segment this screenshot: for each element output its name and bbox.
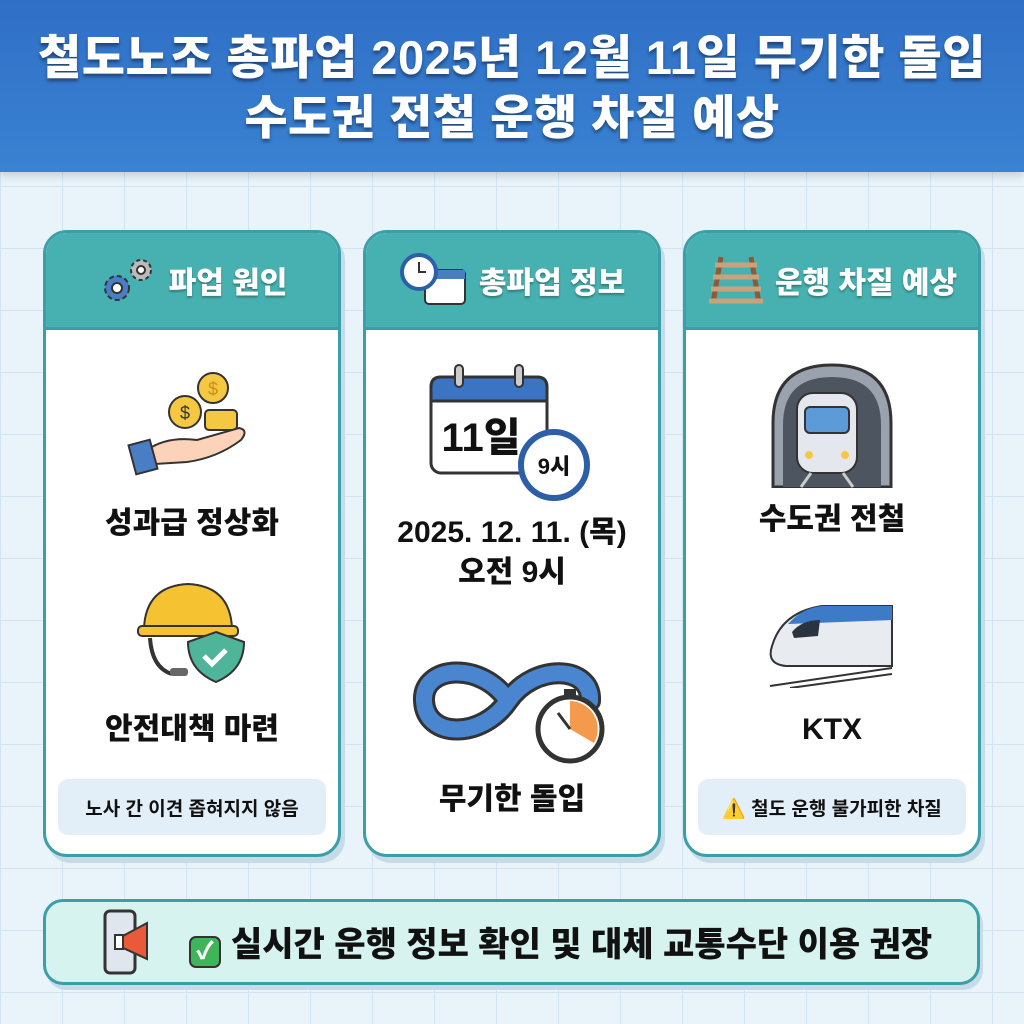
item: 수도권 전철: 수도권 전철 <box>759 503 905 536</box>
title <box>0 0 1024 172</box>
heading: 파업 원인 <box>46 233 338 330</box>
item: date: 2025. 12. 11. (목) <box>397 516 627 549</box>
heading: 운행 차질 예상: 운행 차질 예상 <box>775 267 957 300</box>
panel: causes <box>43 230 341 857</box>
item: 안전대책 마련: 안전대책 마련 <box>105 713 279 746</box>
title: 철도노조 총파업 2025년 12월 11일 무기한 돌입 <box>38 31 986 84</box>
note <box>58 779 326 835</box>
bottom banner <box>43 899 980 985</box>
icon: calendar with clock <box>430 364 590 501</box>
note: 노사 간 이견 좁혀지지 않음 <box>85 798 299 820</box>
icon: hand with coins <box>127 372 246 476</box>
item: KTX: KTX <box>802 713 862 746</box>
item: 무기한 돌입: 무기한 돌입 <box>439 783 585 816</box>
icon: helmet and shield <box>137 583 245 684</box>
panel: disruption <box>683 230 981 857</box>
icon: calendar with clock: 9시 <box>538 454 570 479</box>
item: 성과급 정상화: 성과급 정상화 <box>105 507 279 540</box>
icon: subway in tunnel <box>772 364 892 488</box>
item: date <box>397 516 627 589</box>
icon: infinity and stopwatch <box>412 662 604 764</box>
item: date: 오전 9시 <box>458 556 566 589</box>
heading: 운행 차질 예상 <box>686 233 978 330</box>
icon: phone with megaphone <box>104 910 148 974</box>
icon: hand with coins: $ <box>208 379 218 399</box>
icon: KTX train <box>770 605 893 688</box>
text: recommendation: ✓ <box>196 938 214 964</box>
note: ⚠️ 철도 운행 불가피한 차질 <box>722 798 942 820</box>
note <box>698 779 966 835</box>
heading: 총파업 정보: 총파업 정보 <box>479 267 625 300</box>
panel: strike info <box>363 230 661 857</box>
heading: 총파업 정보 <box>366 233 658 330</box>
text: recommendation: 실시간 운행 정보 확인 및 대체 교통수단 이용 권장 <box>231 926 932 964</box>
icon: calendar with clock: 11일 <box>441 416 521 460</box>
icon: hand with coins: $ <box>180 403 190 423</box>
title: 수도권 전철 운행 차질 예상 <box>244 91 780 144</box>
heading: 파업 원인: 파업 원인 <box>169 267 287 300</box>
